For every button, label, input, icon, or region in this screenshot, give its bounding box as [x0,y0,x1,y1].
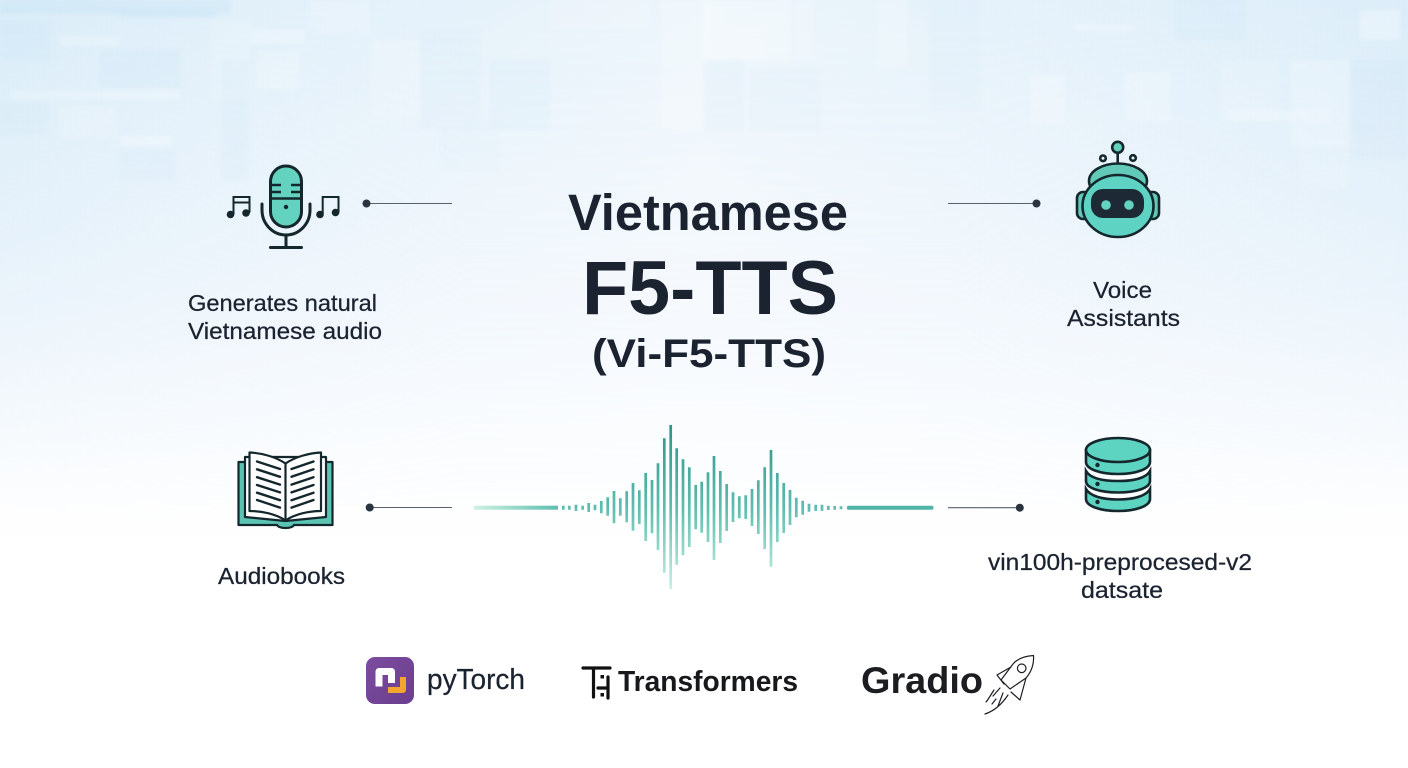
logo: Gradio with rocket: Gradio [861,660,983,701]
chart: audio waveform [474,425,934,589]
title line: F5-TTS: F5-TTS [582,246,838,331]
title line: Vietnamese: Vietnamese [568,184,848,241]
label: Generates natural Vietnamese audio [188,290,382,344]
icon: microphone with music notes [227,166,339,248]
label: vin100h-preprocesed-v2 datsate [988,549,1252,603]
icon: robot head [1077,142,1159,237]
logo: pyTorch [366,657,525,704]
connector: microphone to title [362,200,452,208]
title line: (Vi-F5-TTS): (Vi-F5-TTS) [592,332,826,376]
connector: title to robot [948,200,1040,208]
label: Voice Assistants: Voice [1093,277,1152,303]
label: Generates natural Vietnamese audio: Vietnamese audio [188,318,382,344]
icon: rocket [985,656,1034,714]
connector: waveform to database [948,504,1024,512]
label: Generates natural Vietnamese audio: Generates natural [188,290,377,316]
label: Audiobooks: Audiobooks [218,563,345,589]
icon: open book [238,452,332,528]
label: Voice Assistants [1067,277,1180,331]
connector: book to waveform [366,504,452,512]
background: pale blue digital texture [0,0,1408,452]
title [568,184,848,376]
logo: Gradio with rocket [861,656,1034,714]
icon: database stack [1086,438,1150,511]
label: vin100h-preprocesed-v2 datsate: datsate [1081,577,1163,603]
logo: Transformers: Transformers [618,666,798,698]
logo: pyTorch: pyTorch [427,664,525,696]
label: vin100h-preprocesed-v2 datsate: vin100h-preprocesed-v2 [988,549,1252,575]
label: Voice Assistants: Assistants [1067,305,1180,331]
